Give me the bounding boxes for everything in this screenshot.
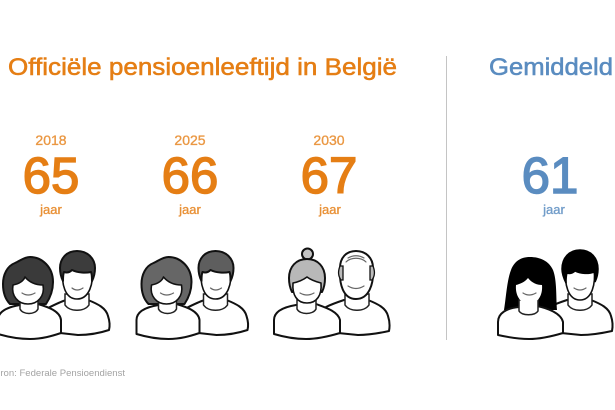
icon: couple 2030, elderly xyxy=(274,248,390,339)
stat: 2030: 2030 xyxy=(313,132,345,148)
title: average: Gemiddeld xyxy=(489,54,613,81)
stat: 2018 xyxy=(23,132,79,217)
stat: 2025: jaar xyxy=(178,202,202,217)
icon: couple 2018, dark hair xyxy=(0,251,110,339)
title: official pension age: Officiële pensioenleeftijd in België xyxy=(8,54,397,81)
stat: 2025: 66 xyxy=(162,147,218,204)
stat: 2030: jaar xyxy=(318,202,342,217)
stat: 2025 xyxy=(162,132,218,217)
stat: 2018: jaar xyxy=(39,202,63,217)
stat: average age: 61 xyxy=(522,147,578,204)
stat: 2030: 67 xyxy=(301,147,357,204)
stat: 2018: 2018 xyxy=(35,132,67,148)
stat: 2030 xyxy=(301,132,357,217)
icon: couple average, black hair xyxy=(498,250,613,339)
divider xyxy=(446,56,447,340)
stat: 2025: 2025 xyxy=(174,132,206,148)
stat: 2018: 65 xyxy=(23,147,79,204)
icon: couple 2025, grey hair xyxy=(136,251,248,339)
stat: average age: jaar xyxy=(542,202,566,217)
